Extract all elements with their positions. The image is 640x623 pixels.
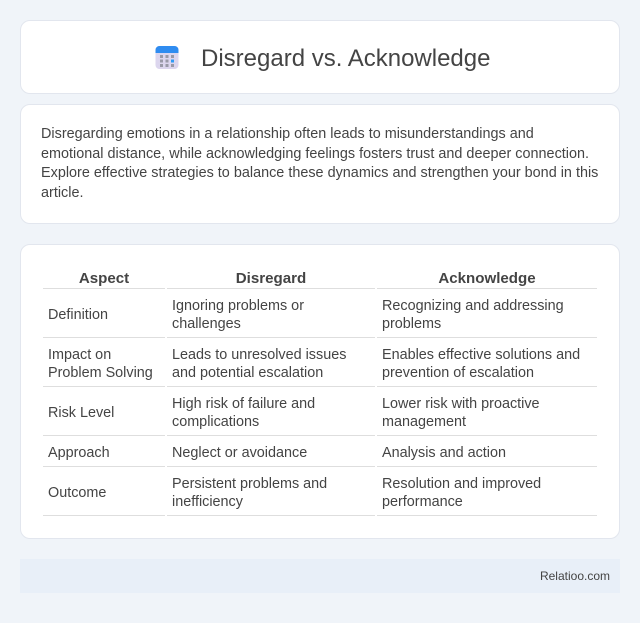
table header: Disregard: Disregard [236,270,306,286]
table header: Acknowledge: Acknowledge [438,270,536,286]
intro text: article. [41,185,83,201]
row: Approach [48,445,506,461]
row: Outcome: Resolution and improved [382,476,541,492]
icon: calendar [156,46,178,69]
intro text: emotional distance, while acknowledging feelings fosters trust and deeper connection. [41,146,589,162]
title: Disregard vs. Acknowledge [201,45,490,72]
row: Approach: Approach [48,445,110,461]
footer text: Relatioo.com [540,569,610,583]
row: Outcome: Persistent problems and [172,476,327,492]
row: Definition: challenges [172,316,241,332]
row: Approach: Neglect or avoidance [172,445,307,461]
row: Impact on Problem Solving: Impact on [48,347,111,363]
table header: Aspect: Aspect [79,270,129,286]
panel: comparison table [20,244,620,539]
row: Impact on Problem Solving: prevention of escalation [382,365,534,381]
row: Impact on Problem Solving [48,347,580,381]
row: Risk Level [48,396,540,430]
row: Risk Level: Lower risk with proactive [382,396,540,412]
row: Outcome: Outcome [48,485,106,501]
row: Definition: problems [382,316,441,332]
intro text: Explore effective strategies to balance these dynamics and strengthen your bond in this [41,165,598,181]
intro text [41,126,598,201]
row: Risk Level: complications [172,414,259,430]
row: Impact on Problem Solving: and potential escalation [172,365,323,381]
row: Outcome: performance [382,494,463,510]
row: Impact on Problem Solving: Leads to unresolved issues [172,347,346,363]
panel: introduction [20,104,620,224]
row: Impact on Problem Solving: Problem Solving [48,365,153,381]
row: Definition: Recognizing and addressing [382,298,564,314]
intro text: Disregarding emotions in a relationship often leads to misunderstandings and [41,126,534,142]
row: Outcome: inefficiency [172,494,243,510]
row: Risk Level: Risk Level [48,405,114,421]
row: Outcome [48,476,541,510]
row: Definition [48,298,564,332]
panel: header [20,20,620,94]
row: Risk Level: management [382,414,466,430]
row: Approach: Analysis and action [382,445,506,461]
row: Risk Level: High risk of failure and [172,396,315,412]
row: Definition: Definition [48,307,108,323]
row: Impact on Problem Solving: Enables effective solutions and [382,347,580,363]
row: Definition: Ignoring problems or [172,298,304,314]
footer [20,559,620,593]
